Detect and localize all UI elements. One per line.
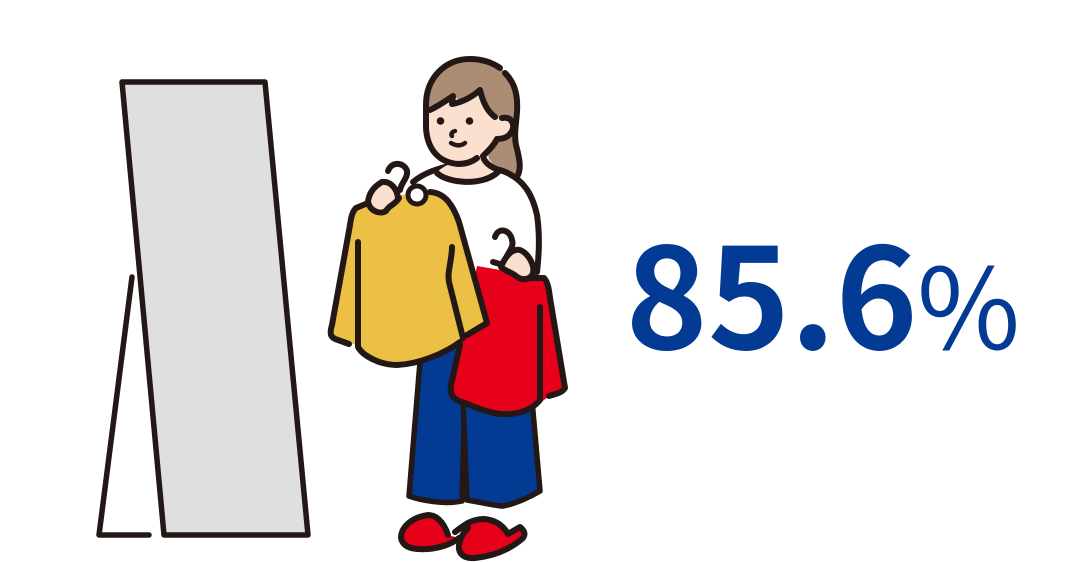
- icon: woman holding two tops: [331, 59, 567, 558]
- eyes, nose and mouth: [437, 117, 473, 145]
- left hanger and hand: [368, 164, 426, 213]
- right hanger and hand: [493, 231, 533, 279]
- face: [428, 90, 513, 162]
- red slippers: [401, 515, 524, 558]
- pants: [409, 345, 540, 506]
- neck: [437, 158, 498, 182]
- statistic: 85.6%: 85.6: [626, 188, 918, 390]
- white top: [413, 165, 539, 272]
- hair outline: [426, 59, 500, 164]
- statistic: 85.6%: %: [917, 220, 1020, 382]
- yellow top: [331, 192, 487, 365]
- hair back: [428, 59, 520, 175]
- red top: [450, 266, 567, 415]
- icon: standing mirror: [99, 82, 308, 535]
